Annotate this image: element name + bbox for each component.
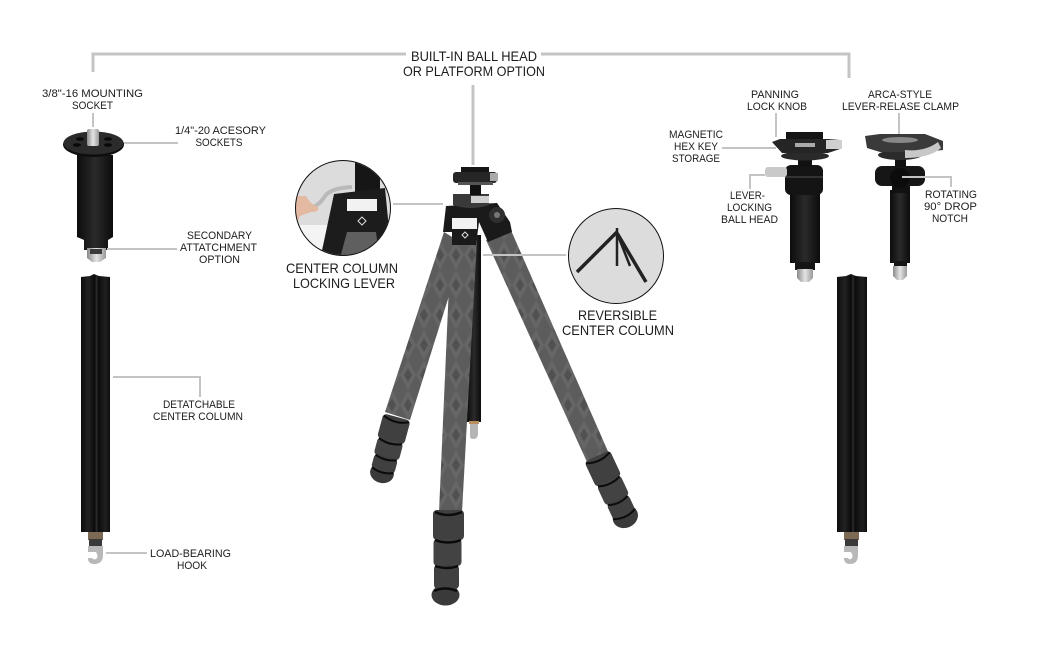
label: arca-style clamp: ARCA-STYLE (868, 89, 932, 101)
heading: built-in ball head or platform option (403, 48, 545, 79)
label: mounting socket: 3/8"-16 MOUNTING (42, 88, 143, 100)
label: reversible center column (562, 307, 674, 338)
label: center column locking lever: LOCKING LEVER (293, 275, 395, 291)
label: magnetic hex key storage (669, 129, 723, 165)
icon: upper column mount (63, 129, 124, 262)
label: center column locking lever: CENTER COLUMN (286, 260, 398, 276)
label: rotating 90 degree drop notch: 90° DROP (924, 201, 977, 213)
label: panning lock knob: LOCK KNOB (747, 101, 807, 113)
leader: lever-locking ball head (750, 175, 765, 189)
center grip and foot (432, 510, 464, 606)
callout: reversible center column (568, 208, 664, 304)
label: secondary attachment: OPTION (199, 254, 240, 266)
leader: secondary attachment (107, 248, 177, 250)
label: rotating 90 degree drop notch (924, 189, 977, 225)
label: accessory sockets (175, 125, 267, 149)
center leg (439, 240, 477, 512)
label: accessory sockets: 1/4"-20 ACESORY (175, 125, 267, 137)
label: magnetic hex key storage: HEX KEY (674, 141, 719, 153)
label: arca-style clamp: LEVER-RELASE CLAMP (842, 101, 959, 113)
center column (467, 235, 481, 422)
leader: load-bearing hook (106, 552, 147, 554)
left grip and foot (366, 413, 411, 486)
icon: right detachable center column (837, 274, 867, 564)
label: panning lock knob (747, 89, 807, 113)
leader: reversible center column (483, 254, 566, 256)
leader: mounting socket (92, 113, 94, 127)
tripod (366, 167, 643, 606)
leader: rotating drop notch (902, 177, 951, 187)
right grip and foot (584, 450, 643, 533)
leader: head to heading (472, 85, 474, 165)
leader: center column locking lever (393, 203, 443, 205)
tripod hub (443, 194, 512, 245)
icon: detachable center column (81, 274, 110, 564)
label: reversible center column: CENTER COLUMN (562, 322, 674, 338)
label: detachable center column: DETATCHABLE (163, 399, 235, 411)
label: magnetic hex key storage: STORAGE (672, 153, 720, 165)
label: center column locking lever (286, 260, 398, 291)
label: lever-locking ball head: LOCKING (727, 202, 772, 214)
callout: center column locking lever (295, 160, 391, 256)
label: magnetic hex key storage: MAGNETIC (669, 129, 723, 141)
label: lever-locking ball head (721, 190, 778, 226)
label: secondary attachment: ATTATCHMENT (180, 242, 257, 254)
heading: built-in ball head or platform option: BUILT-IN BALL HEAD (411, 48, 537, 64)
top bracket: built-in ball head or platform option (93, 54, 849, 78)
leader: magnetic hex key storage (722, 147, 776, 149)
label: rotating 90 degree drop notch: ROTATING (925, 189, 977, 201)
leader: detachable center column (113, 377, 200, 397)
center column hook (469, 421, 479, 439)
label: load-bearing hook: HOOK (177, 560, 208, 572)
label: rotating 90 degree drop notch: NOTCH (932, 213, 968, 225)
label: load-bearing hook (150, 548, 231, 572)
icon: ball head column (765, 132, 842, 282)
label: detachable center column (153, 399, 243, 423)
label: lever-locking ball head: BALL HEAD (721, 214, 778, 226)
label: mounting socket: SOCKET (72, 100, 113, 112)
label: secondary attachment: SECONDARY (187, 230, 253, 242)
left leg (385, 232, 465, 420)
leader: arca-style clamp (898, 113, 900, 134)
leader: accessory sockets (120, 142, 178, 144)
label: accessory sockets: SOCKETS (196, 137, 242, 149)
icon: clamp column (865, 134, 943, 280)
label: reversible center column: REVERSIBLE (578, 307, 657, 323)
ball head and clamp (453, 167, 498, 195)
heading: built-in ball head or platform option: OR PLATFORM OPTION (403, 63, 545, 79)
label: mounting socket (42, 88, 143, 112)
label: panning lock knob: PANNING (751, 89, 799, 101)
label: arca-style clamp (842, 89, 959, 113)
leader: panning lock knob (775, 113, 777, 137)
label: detachable center column: CENTER COLUMN (153, 411, 243, 423)
label: secondary attachment (180, 230, 257, 266)
label: load-bearing hook: LOAD-BEARING (150, 548, 231, 560)
right leg (486, 228, 610, 462)
label: lever-locking ball head: LEVER- (730, 190, 765, 202)
